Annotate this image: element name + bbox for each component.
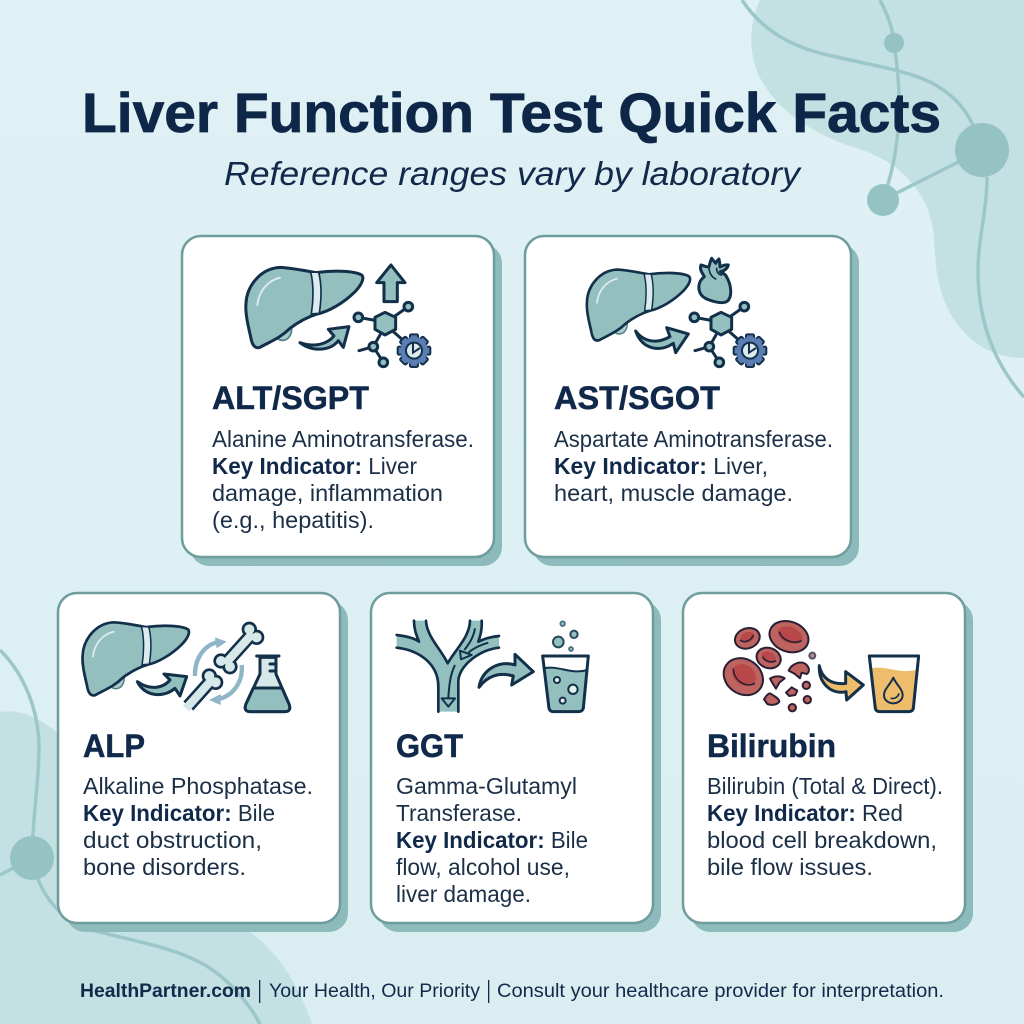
heading: ALP bbox=[83, 728, 145, 764]
lower bone bbox=[186, 668, 223, 709]
description: duct obstruction, bbox=[83, 827, 262, 853]
description: Alanine Aminotransferase. bbox=[212, 426, 474, 452]
description: Key Indicator: Red bbox=[707, 800, 903, 826]
panel: Bilirubin bbox=[683, 593, 973, 932]
description: (e.g., hepatitis). bbox=[212, 507, 374, 533]
description bbox=[396, 773, 588, 907]
footer: Your Health, Our Priority bbox=[269, 981, 481, 1002]
description: liver damage. bbox=[396, 881, 531, 907]
title: Liver Function Test Quick Facts bbox=[82, 81, 941, 144]
description: Aspartate Aminotransferase. bbox=[554, 426, 833, 452]
description: Key Indicator: Bile bbox=[396, 827, 588, 853]
description: Key Indicator: Liver, bbox=[554, 453, 768, 479]
panel: GGT bbox=[371, 593, 661, 932]
description bbox=[212, 426, 474, 533]
description: Gamma-Glutamyl bbox=[396, 773, 577, 799]
glass bbox=[544, 668, 587, 712]
footer: Consult your healthcare provider for interpretation. bbox=[497, 981, 944, 1002]
heading: ALT/SGPT bbox=[212, 380, 369, 416]
description: bone disorders. bbox=[83, 854, 246, 880]
panel: AST/SGOT bbox=[525, 236, 859, 566]
icon: liver, up arrow, molecule and gear bbox=[246, 265, 430, 367]
description: bile flow issues. bbox=[707, 854, 873, 880]
icon: liver, bones and flask bbox=[83, 622, 290, 712]
network lines: bottom left bbox=[0, 650, 260, 1024]
description: Key Indicator: Bile bbox=[83, 800, 275, 826]
description: heart, muscle damage. bbox=[554, 480, 793, 506]
description: Key Indicator: Liver bbox=[212, 453, 417, 479]
background blob: top right bbox=[751, 0, 1024, 358]
heading: AST/SGOT bbox=[554, 380, 720, 416]
description: flow, alcohol use, bbox=[396, 854, 570, 880]
description: Transferase. bbox=[396, 800, 522, 826]
description: Bilirubin (Total & Direct). bbox=[707, 773, 943, 799]
upper bone bbox=[213, 622, 264, 674]
description: Alkaline Phosphatase. bbox=[83, 773, 313, 799]
background blob: bottom left bbox=[0, 711, 312, 1024]
flask bbox=[245, 657, 290, 712]
footer bbox=[80, 980, 944, 1003]
description bbox=[83, 773, 313, 880]
description: damage, inflammation bbox=[212, 480, 443, 506]
icon: liver, heart, molecule and gear bbox=[587, 258, 766, 367]
urine cup bbox=[871, 668, 917, 712]
description bbox=[707, 773, 943, 880]
footer: HealthPartner.com bbox=[80, 981, 251, 1002]
panel: ALT/SGPT bbox=[182, 236, 502, 566]
heading: Bilirubin bbox=[707, 728, 836, 764]
panel: ALP bbox=[58, 593, 348, 932]
network lines: top right bbox=[742, 0, 1024, 397]
description bbox=[554, 426, 833, 506]
description: blood cell breakdown, bbox=[707, 827, 937, 853]
icon: red blood cells and yellow urine bbox=[716, 616, 919, 712]
subtitle: Reference ranges vary by laboratory bbox=[224, 155, 803, 192]
heading: GGT bbox=[396, 728, 463, 764]
icon: bile ducts and fizzy drink bbox=[397, 621, 588, 712]
